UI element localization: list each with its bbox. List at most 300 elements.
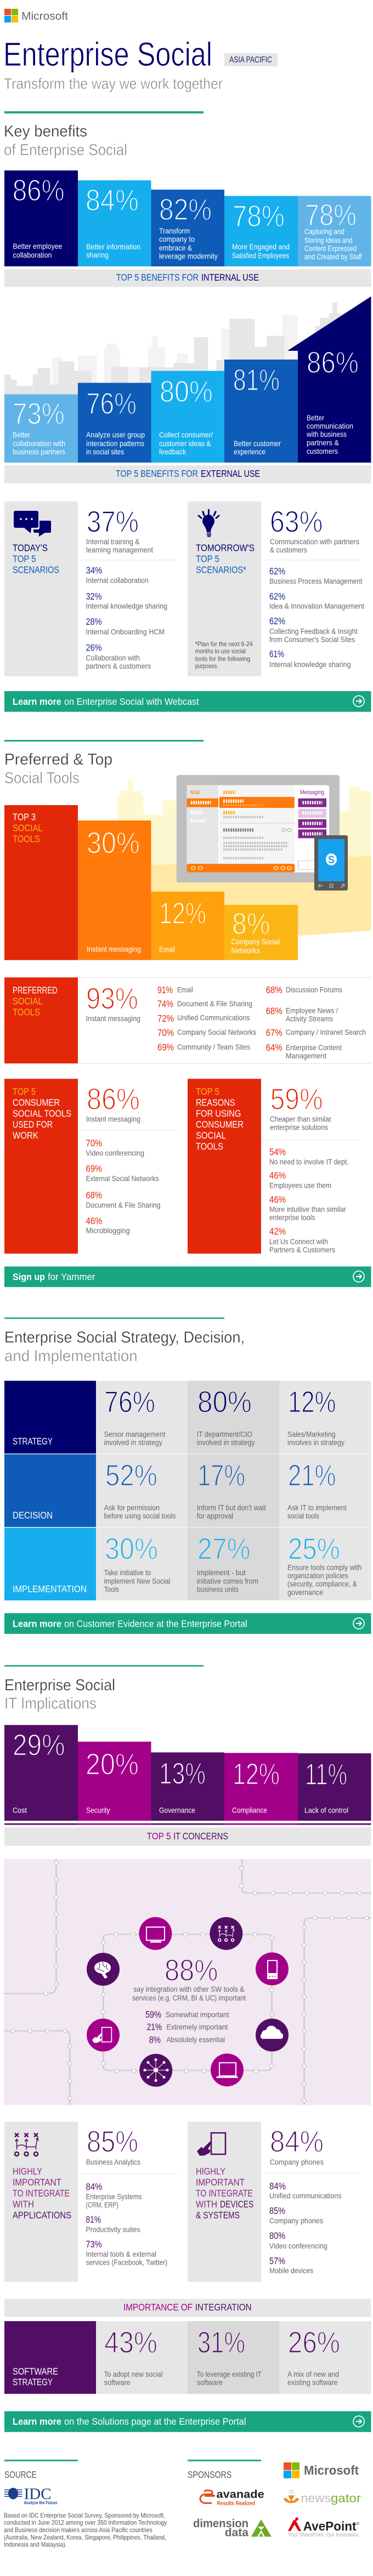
tile: 86% with roof arrow: customers <box>307 447 338 455</box>
list: consumer tools: Video conferencing <box>86 1148 144 1157</box>
tile: 76%: interaction patterns <box>86 439 144 448</box>
heading: preferred and top: Social Tools <box>4 770 80 787</box>
panel: integration circuit <box>4 1859 371 2105</box>
tile: 12%: 12% <box>159 896 206 930</box>
list: tomorrow's scenarios: Idea & Innovation Management <box>269 602 364 611</box>
tile: top 3 heading <box>4 805 78 960</box>
panel heading: SOCIAL TOOLS <box>13 1108 71 1119</box>
illustration: monitor with mail and messaging <box>177 775 340 882</box>
icon: smartphone <box>256 1952 289 1985</box>
list: applications: services (Facebook, Twitter) <box>86 2258 167 2267</box>
yellow skyline backdrop <box>117 780 371 936</box>
tile: 86%: 86% <box>13 173 65 207</box>
cell: 43%: software <box>104 2378 131 2387</box>
source note: Indonesia and Malaysia). <box>4 2541 67 2549</box>
icon: monitor <box>139 1917 172 1950</box>
list: tomorrow's scenarios: from Consumer's Social Sites <box>269 635 355 644</box>
illustration: phone with skype <box>314 835 348 891</box>
heading: key benefits: of Enterprise Social <box>4 141 127 159</box>
list: reasons: 46% <box>269 1170 286 1181</box>
panel heading: TO INTEGRATE <box>196 2187 253 2198</box>
list: consumer tools: 46% <box>86 1215 102 1226</box>
tile: cost: Cost <box>13 1805 27 1814</box>
tile: 30% <box>78 820 151 960</box>
list: preferred tools column 2: 67% <box>266 1027 282 1038</box>
row label <box>4 1381 96 1454</box>
logo: dimension data: data <box>225 2526 248 2539</box>
list: consumer tools: 69% <box>86 1163 102 1174</box>
cell: 52%: before using social tools <box>104 1512 176 1520</box>
tile: 78% capturing: Content Expressed <box>304 244 357 253</box>
list: reasons: 54% <box>269 1147 286 1158</box>
panel heading <box>196 2166 253 2220</box>
title: Enterprise Social <box>3 36 212 73</box>
source note <box>4 2511 167 2549</box>
tile: 86%: Better employee <box>13 242 63 250</box>
panel heading: TODAY'S <box>13 543 48 554</box>
heading: strategy: Enterprise Social Strategy, Decision, <box>4 1329 245 1346</box>
list: devices: 80% <box>269 2230 285 2241</box>
internal benefit tiles <box>4 170 371 266</box>
section: IT implications <box>4 1665 371 2432</box>
monitor labels: Messaging <box>300 789 324 796</box>
tile: 82%: embrace & <box>159 243 193 252</box>
list: preferred tools column 2: Employee News / <box>286 1006 338 1015</box>
stat: 88% integration importance: Somewhat important <box>166 2010 229 2019</box>
cell: 21%: social tools <box>287 1512 319 1520</box>
circuit lines and nodes <box>4 1859 371 2105</box>
list: preferred tools column 1: Email <box>177 985 193 994</box>
banner: internal use: INTERNAL USE <box>201 272 259 283</box>
list: tomorrow's scenarios: Internal knowledge sharing <box>269 660 351 669</box>
call to action: customer evidence: Learn more <box>13 1618 61 1629</box>
cell: 30%: Tools <box>104 1585 119 1593</box>
panel heading: TOOLS <box>196 1141 223 1152</box>
lead stat: 63%: Communication with partners <box>270 537 359 546</box>
tile: 73%: 73% <box>13 397 65 431</box>
row: software strategy <box>4 2321 371 2394</box>
region tag <box>224 53 278 66</box>
list: consumer tools: 70% <box>86 1138 102 1149</box>
icon: chat bubbles <box>14 511 51 537</box>
cell: 76%: 76% <box>104 1385 155 1419</box>
logo: avanade: Results Realized <box>217 2501 255 2507</box>
tile: security: 20% <box>86 1747 139 1781</box>
logo: newsgator <box>284 2490 361 2505</box>
footnote <box>195 640 253 670</box>
cell: 76%: Senior management <box>104 1430 166 1439</box>
panel heading: IMPORTANT <box>13 2177 61 2188</box>
footnote: tools for the following <box>195 655 250 663</box>
tile: 12% <box>151 892 224 960</box>
tile: 82% <box>151 190 224 266</box>
Microsoft logo <box>4 9 68 22</box>
panel heading: IMPORTANT <box>196 2177 245 2188</box>
lead stat: 37%: Internal training & <box>86 537 140 546</box>
list: devices: Mobile devices <box>269 2266 313 2275</box>
row: implementation <box>4 1528 362 1600</box>
tile: 86% with roof arrow: partners & <box>307 438 340 447</box>
panel heading: CONSUMER <box>196 1119 244 1130</box>
cell: 25%: governance <box>287 1588 323 1597</box>
list: preferred tools column 1: Company Social Networks <box>177 1028 256 1036</box>
cell: 31% <box>197 2325 262 2387</box>
tile: 30%: Instant messaging <box>87 945 141 954</box>
panel: preferred social tools <box>4 977 371 1064</box>
panel heading: SCENARIOS* <box>196 565 246 575</box>
cell: 80%: involved in strategy <box>197 1438 255 1447</box>
source note: Based on IDC Enterprise Social Survey, Sponsored by Microsoft, <box>4 2511 165 2519</box>
cell: 26% <box>287 2325 340 2387</box>
tile: 78% capturing: Storing Ideas and <box>304 236 352 244</box>
lead stat: 37%: 37% <box>87 505 139 539</box>
tile: 86% with roof arrow: communication <box>307 421 353 430</box>
icon: light bulb <box>197 509 220 537</box>
panel heading: HIGHLY <box>13 2166 42 2177</box>
tile: 81%: 81% <box>233 363 280 397</box>
tile: 30%: 30% <box>87 826 140 860</box>
cell: 26%: A mix of new and <box>287 2370 339 2379</box>
row label: IMPLEMENTATION <box>13 1583 87 1594</box>
stat: 88% integration importance <box>132 1953 246 2045</box>
tile: 78% engaged: 78% <box>233 199 285 233</box>
panel heading: FOR USING <box>196 1108 241 1119</box>
banner: external use: TOP 5 BENEFITS FOR <box>116 468 198 479</box>
heading: key benefits <box>4 123 127 159</box>
IDC logo <box>4 2486 58 2505</box>
list: today's scenarios: Internal collaboration <box>86 575 149 584</box>
tile: 81%: Better customer <box>234 439 281 448</box>
tile: 86% with roof arrow: with business <box>306 430 347 438</box>
tile: 8%: Networks <box>231 946 260 955</box>
cell: 25%: Ensure tools comply with <box>287 1563 362 1571</box>
stat: 88% integration importance: services (e.g. CRM, BI & UC) important <box>132 1993 246 2002</box>
list: consumer tools <box>86 1138 160 1235</box>
list: preferred tools column 1: Unified Communications <box>177 1013 250 1022</box>
tile: 80% <box>151 371 224 463</box>
IT concern tiles <box>4 1725 371 1821</box>
source heading: SOURCE <box>4 2469 37 2480</box>
panel: reasons for using consumer tools <box>188 1079 360 1254</box>
panel heading: TOP 5 <box>13 554 36 565</box>
cell: 17%: Inform IT but don't wait <box>197 1503 266 1512</box>
tile: top 3 heading: TOP 3 <box>13 812 36 823</box>
panel: today's scenarios <box>4 501 177 676</box>
tile: 76% <box>78 383 151 463</box>
lead stat: 63% <box>270 505 359 554</box>
lead stat: 37%: learning management <box>86 545 153 554</box>
cell: 30%: implement New Social <box>104 1576 170 1585</box>
list: devices: 84% <box>269 2180 286 2191</box>
list: consumer tools: 68% <box>86 1190 102 1201</box>
cell: 27%: Implement - but <box>197 1568 246 1577</box>
cell: 27%: business units <box>197 1585 239 1593</box>
cell: 80% <box>197 1385 255 1447</box>
tile: 76%: 76% <box>86 386 137 420</box>
logo: avanade <box>200 2489 264 2507</box>
panel heading: TOP 5 <box>196 554 219 565</box>
list: reasons: enterprise tools <box>269 1213 315 1222</box>
stat: 88% integration importance: 59% <box>145 2009 161 2020</box>
panel heading: SOCIAL <box>196 1130 226 1141</box>
lead stat: 85%: Business Analytics <box>86 2157 140 2166</box>
logo: AvePoint: AvePoint <box>303 2519 357 2533</box>
table backgrounds <box>96 1381 371 1600</box>
list: preferred tools column 2: Enterprise Content <box>286 1043 342 1052</box>
tile: 82%: Transform <box>159 226 190 235</box>
cell: 26%: 26% <box>288 2325 340 2359</box>
panel: tomorrow's scenarios <box>188 501 364 676</box>
tile: top 3 heading: SOCIAL <box>13 823 43 834</box>
row label: STRATEGY <box>13 1436 53 1447</box>
monitor labels <box>190 789 324 796</box>
row: decision <box>4 1454 347 1527</box>
cell: 21%: 21% <box>288 1458 336 1492</box>
stat: 88% integration importance: say integration with other SW tools & <box>133 1985 245 1993</box>
panel heading: HIGHLY <box>196 2166 225 2177</box>
list: today's scenarios: partners & customers <box>86 662 151 670</box>
Microsoft logo: Microsoft <box>21 10 68 22</box>
call to action: solutions page <box>4 2411 371 2432</box>
footnote: *Plan for the next 6-24 <box>195 640 253 648</box>
tile: governance: 13% <box>159 1756 206 1790</box>
logo: AvePoint: Your SharePoint. Our Innovation. <box>288 2532 360 2538</box>
tile: 80%: feedback <box>159 447 187 456</box>
cell: 12%: Sales/Marketing <box>287 1430 336 1439</box>
list: preferred tools column 2: Management <box>286 1051 326 1060</box>
tile: 78% capturing: Capturing and <box>304 227 344 236</box>
list: preferred tools column 1: 91% <box>157 984 173 995</box>
lead stat: 63%: 63% <box>270 505 323 539</box>
cell: 76%: involved in strategy <box>104 1438 162 1447</box>
top 3 social tools tiles <box>4 805 298 960</box>
list: preferred tools column 2 <box>266 984 366 1060</box>
row label: SOFTWARE <box>13 2366 58 2376</box>
lead stat: 37% <box>86 505 153 554</box>
heading: IT implications: IT Implications <box>4 1695 97 1712</box>
list: today's scenarios: Internal Onboarding HCM <box>86 627 165 636</box>
row label <box>4 2321 96 2394</box>
row label <box>4 1454 96 1527</box>
cell: 12%: involves in strategy <box>287 1438 344 1447</box>
IDC logo: IDC <box>24 2486 52 2503</box>
heading: IT implications <box>4 1677 115 1712</box>
cell: 43% <box>104 2325 162 2387</box>
logo: avanade: avanade <box>216 2489 264 2501</box>
cell: 17%: for approval <box>197 1512 233 1520</box>
list: preferred tools column 1: 74% <box>157 999 173 1010</box>
list: preferred tools column 1: 70% <box>157 1027 174 1038</box>
list: today's scenarios: 34% <box>86 565 102 576</box>
panel heading: TO INTEGRATE <box>13 2187 70 2198</box>
footnote: months to use social <box>195 647 246 655</box>
lead stat: 93%: 93% <box>86 982 138 1016</box>
list: preferred tools column 2: Activity Streams <box>286 1014 333 1023</box>
cell: 52%: Ask for permission <box>104 1503 160 1512</box>
tile: lack of control <box>298 1753 371 1821</box>
tile: 73%: business partners <box>13 447 65 456</box>
call to action: customer evidence <box>4 1613 371 1634</box>
panel heading: USED FOR <box>13 1119 53 1130</box>
tile: 82%: 82% <box>159 192 212 226</box>
panel heading <box>13 2166 71 2220</box>
tile: 8%: 8% <box>232 907 270 941</box>
list: applications: 81% <box>86 2214 101 2225</box>
call to action: solutions page: on the Solutions page at the Enterprise Portal <box>64 2416 246 2427</box>
list: applications: 84% <box>86 2181 102 2192</box>
cell: 30%: 30% <box>105 1531 158 1565</box>
city skyline backdrop <box>4 303 342 395</box>
cell: 27% <box>197 1531 258 1593</box>
logo: Microsoft <box>284 2463 359 2478</box>
cell: 12%: 12% <box>288 1385 336 1419</box>
tile: 86%: collaboration <box>13 250 52 259</box>
list: devices: Video conferencing <box>269 2241 327 2250</box>
panel: consumer tools used for work <box>4 1079 177 1253</box>
call to action: yammer: for Yammer <box>48 1272 95 1283</box>
logo: Microsoft: Microsoft <box>304 2463 359 2477</box>
cell: 17% <box>197 1458 266 1520</box>
list: reasons: 42% <box>269 1226 286 1236</box>
tile: 8%: Company Social <box>231 937 280 946</box>
icon: laptop <box>211 2054 244 2087</box>
tile: compliance: 12% <box>233 1757 280 1791</box>
tile: compliance: Compliance <box>232 1805 267 1814</box>
heading: IT implications: Enterprise Social <box>4 1677 115 1694</box>
tile: 78% capturing: and Created by Staff <box>304 252 362 261</box>
cell: 27%: initiative comes from <box>197 1576 258 1585</box>
logo: AvePoint: ® <box>357 2522 360 2526</box>
panel heading <box>4 1079 78 1253</box>
region tag: ASIA PACIFIC <box>229 55 272 65</box>
external benefit tiles <box>4 297 371 463</box>
row label <box>4 1528 96 1600</box>
lead stat: 59%: 59% <box>270 1082 323 1116</box>
tile: 84%: sharing <box>86 250 109 259</box>
tile: 84%: 84% <box>86 183 139 217</box>
panel heading: DEVICES <box>220 2198 253 2209</box>
tile: 81%: experience <box>234 447 265 456</box>
list: preferred tools column 2: 64% <box>266 1042 282 1053</box>
tile: 80%: customer ideas & <box>159 439 211 448</box>
cell: 21%: Ask IT to implement <box>287 1503 347 1512</box>
icon: tablet and hand <box>197 2133 225 2156</box>
icon: brain <box>87 1953 120 1986</box>
tile: 76%: Analyze user group <box>86 430 145 439</box>
stat: 88% integration importance: Extremely important <box>166 2022 228 2031</box>
lead stat: 63%: & customers <box>270 545 307 554</box>
tile: 78% engaged: More Engaged and <box>232 242 290 251</box>
tile: lack of control: 11% <box>305 1757 347 1791</box>
cell: 12% <box>287 1385 344 1447</box>
list: consumer tools: Document & File Sharing <box>86 1200 160 1209</box>
list: consumer tools: Microblogging <box>86 1226 130 1235</box>
icon: strategy plays <box>210 1917 242 1950</box>
tile: lack of control: Lack of control <box>304 1805 348 1814</box>
sponsors heading: SPONSORS <box>188 2469 231 2480</box>
logo: newsgator: news <box>301 2492 331 2505</box>
banner: IT concerns: TOP 5 <box>147 1831 171 1842</box>
lead stat: 93%: Instant messaging <box>86 1014 140 1023</box>
section: strategy, decision, implementation <box>4 1318 371 1634</box>
tile: 84% <box>78 180 151 266</box>
icon: people network <box>139 2054 172 2087</box>
panel heading <box>13 543 59 575</box>
list: devices: 57% <box>269 2255 285 2266</box>
lead stat: 59%: enterprise solutions <box>270 1123 328 1132</box>
banner: external use <box>4 465 371 483</box>
stat: 88% integration importance: 21% <box>147 2021 162 2032</box>
list: today's scenarios: Internal knowledge sharing <box>86 602 167 611</box>
panel heading: TOMORROW'S <box>196 543 255 554</box>
call to action: webcast: Learn more <box>13 696 61 707</box>
panel heading: TOOLS <box>13 1007 40 1018</box>
tile: 73%: Better <box>13 430 30 439</box>
list: today's scenarios: 26% <box>86 642 102 653</box>
cell: 21% <box>287 1458 347 1520</box>
banner: importance of integration <box>4 2299 371 2317</box>
tile: 84%: Better information <box>86 242 140 251</box>
list: reasons: 46% <box>269 1194 286 1205</box>
list: preferred tools column 2: 68% <box>266 984 282 995</box>
IDC logo: Analyze the Future <box>24 2500 58 2505</box>
banner: importance of integration: INTEGRATION <box>195 2301 252 2312</box>
cell: 27%: 27% <box>197 1531 250 1565</box>
tile: compliance <box>224 1753 298 1821</box>
cell: 25%: organization policies <box>287 1571 348 1580</box>
banner: internal use <box>4 269 371 287</box>
tile: security <box>78 1742 151 1821</box>
tile: cost <box>4 1725 78 1821</box>
panel heading: SOCIAL <box>13 996 43 1007</box>
list: devices <box>269 2180 341 2275</box>
list: today's scenarios: Collaboration with <box>86 653 140 662</box>
lead stat: 59%: Cheaper than similar <box>270 1115 331 1124</box>
tile: top 3 heading: TOOLS <box>13 834 40 845</box>
list: preferred tools column 1: 69% <box>157 1042 174 1053</box>
row: strategy <box>4 1381 344 1454</box>
heading: strategy: and Implementation <box>4 1347 138 1365</box>
row label: STRATEGY <box>13 2376 53 2387</box>
panel heading <box>196 543 255 575</box>
list: reasons: No need to involve IT dept. <box>269 1157 349 1166</box>
cell: 43%: To adopt new social <box>104 2370 162 2379</box>
list: preferred tools column 2: 68% <box>266 1006 282 1017</box>
monitor labels: Mail <box>190 789 200 796</box>
cell: 25%: (security, compliance, & <box>287 1580 357 1588</box>
list: devices: Unified communications <box>269 2191 341 2200</box>
tile: 12%: Email <box>159 945 175 954</box>
cell: 52% <box>104 1458 176 1520</box>
tile: 78% capturing <box>298 196 371 266</box>
icon: strategy plays <box>15 2133 38 2156</box>
panel heading: SCENARIOS <box>13 565 59 575</box>
panel heading: TOP 5 <box>13 1086 36 1097</box>
tile: 8% <box>224 905 298 960</box>
cell: 80%: 80% <box>197 1385 252 1419</box>
subtitle: Transform the way we work together <box>4 75 223 92</box>
call to action: solutions page: Learn more <box>13 2416 61 2427</box>
list: devices: Company phones <box>269 2216 323 2225</box>
cell: 76% <box>104 1385 166 1447</box>
banner: internal use: TOP 5 BENEFITS FOR <box>116 272 199 283</box>
source column <box>4 2469 167 2549</box>
banner: IT concerns: IT CONCERNS <box>173 1831 228 1842</box>
list: preferred tools column 1: 72% <box>157 1013 174 1024</box>
tile: 73%: collaboration with <box>13 439 65 448</box>
tile: governance <box>151 1752 224 1821</box>
source note: conducted in June 2012 among over 350 Information Technology <box>4 2519 167 2527</box>
